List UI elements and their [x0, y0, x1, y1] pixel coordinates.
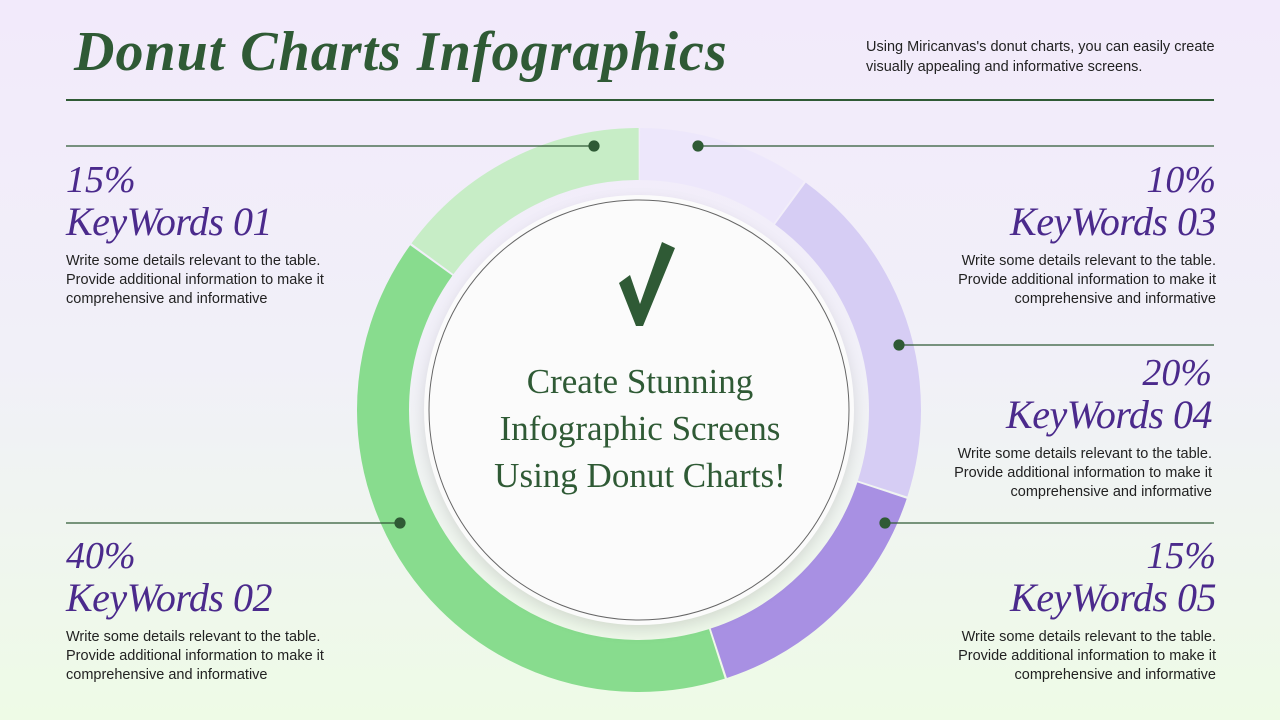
center text: Using Donut Charts! [494, 456, 786, 495]
keyword 04: Provide additional information to make it [954, 465, 1212, 481]
keyword 02: Provide additional information to make it [66, 648, 324, 664]
icon: check mark [619, 242, 675, 326]
keyword 03 [958, 159, 1216, 307]
keyword 02: 40% [66, 535, 136, 577]
keyword 05: Provide additional information to make it [958, 648, 1216, 664]
subtitle [866, 39, 1215, 75]
keyword 01: KeyWords 01 [66, 199, 272, 244]
keyword 02: comprehensive and informative [66, 667, 268, 683]
subtitle: Using Miricanvas's donut charts, you can easily create [866, 39, 1215, 55]
center text [494, 362, 786, 495]
title: Donut Charts Infographics [74, 21, 728, 83]
keyword 03: 10% [1146, 159, 1216, 201]
center text: Create Stunning [527, 362, 753, 401]
keyword 02: Write some details relevant to the table. [66, 629, 320, 645]
keyword 01 [66, 159, 324, 307]
keyword 04: KeyWords 04 [1006, 392, 1212, 437]
keyword 01: comprehensive and informative [66, 291, 268, 307]
keyword 02 [66, 535, 324, 683]
keyword 03: comprehensive and informative [1014, 291, 1216, 307]
keyword 03: Provide additional information to make it [958, 272, 1216, 288]
leader lines [66, 141, 1214, 528]
keyword 02: KeyWords 02 [66, 575, 272, 620]
keyword 01: Provide additional information to make it [66, 272, 324, 288]
keyword 01: Write some details relevant to the table. [66, 253, 320, 269]
keyword 04: 20% [1142, 352, 1212, 394]
keyword 03: Write some details relevant to the table. [962, 253, 1216, 269]
keyword 05 [958, 535, 1216, 683]
keyword 05: 15% [1146, 535, 1216, 577]
keyword 04: comprehensive and informative [1010, 484, 1212, 500]
center text: Infographic Screens [500, 409, 780, 448]
keyword 03: KeyWords 03 [1010, 199, 1216, 244]
subtitle: visually appealing and informative screens. [866, 59, 1142, 75]
keyword 01: 15% [66, 159, 136, 201]
keyword 05: Write some details relevant to the table. [962, 629, 1216, 645]
keyword 04: Write some details relevant to the table. [958, 446, 1212, 462]
keyword 04 [954, 352, 1212, 500]
keyword 05: KeyWords 05 [1010, 575, 1216, 620]
keyword 05: comprehensive and informative [1014, 667, 1216, 683]
